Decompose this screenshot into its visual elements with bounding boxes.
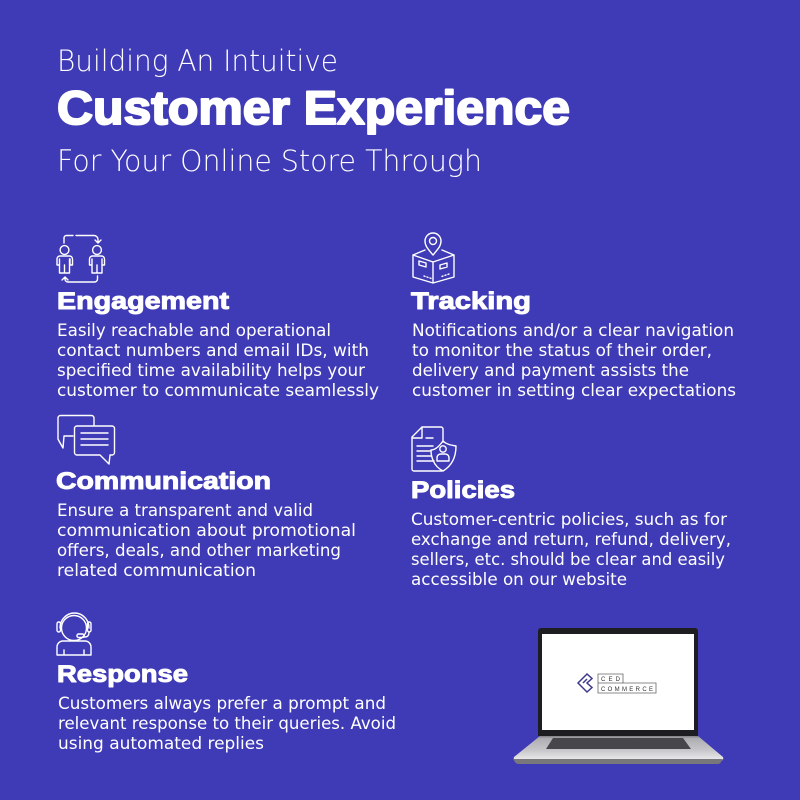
- icon: two people exchanging: [57, 236, 105, 282]
- logo mark: [578, 674, 592, 692]
- panel: response: [57, 613, 396, 753]
- title: Building An Intuitive: [57, 44, 338, 78]
- text block: delivery and payment assists the: [412, 361, 689, 380]
- text block: to monitor the status of their order,: [412, 341, 712, 360]
- panel: policies: [411, 427, 731, 589]
- text block: specified time availability helps your: [57, 361, 365, 380]
- text block: Notifications and/or a clear navigation: [412, 321, 734, 340]
- laptop lid: [538, 628, 698, 736]
- panel: tracking: [411, 233, 736, 400]
- panel: engagement: [57, 236, 379, 400]
- text block: using automated replies: [58, 734, 264, 753]
- text block: [58, 694, 396, 753]
- icon: box with location pin: [413, 233, 454, 283]
- text block: [57, 501, 356, 580]
- heading: Tracking: [411, 288, 531, 315]
- title: [57, 44, 570, 178]
- title: For Your Online Store Through: [57, 144, 482, 178]
- text block: Customer-centric policies, such as for: [411, 510, 727, 529]
- icon: document with shield: [412, 427, 456, 471]
- logo: [578, 674, 656, 693]
- text block: [412, 321, 736, 400]
- logo wordmark: COMMERCE: [601, 687, 653, 693]
- title: Customer Experience: [57, 81, 570, 134]
- text block: customer to communicate seamlessly: [57, 381, 379, 400]
- text block: communication about promotional: [57, 521, 356, 540]
- icon: headset agent: [57, 613, 91, 655]
- text block: sellers, etc. should be clear and easily: [411, 550, 725, 569]
- logo wordmark: CED: [601, 677, 621, 683]
- logo wordmark: [598, 674, 656, 693]
- heading: Response: [57, 661, 188, 688]
- text block: exchange and return, refund, delivery,: [411, 530, 731, 549]
- text block: [411, 510, 731, 589]
- text block: contact numbers and email IDs, with: [57, 341, 369, 360]
- text block: Ensure a transparent and valid: [57, 501, 313, 520]
- text block: related communication: [57, 561, 256, 580]
- laptop illustration: [513, 628, 723, 764]
- text block: offers, deals, and other marketing: [57, 541, 341, 560]
- laptop base: [514, 736, 723, 761]
- text block: Easily reachable and operational: [57, 321, 331, 340]
- text block: [57, 321, 379, 400]
- text block: relevant response to their queries. Avoid: [58, 714, 396, 733]
- heading: Communication: [56, 468, 271, 495]
- text block: customer in setting clear expectations: [412, 381, 736, 400]
- laptop screen: [542, 634, 694, 730]
- panel: communication: [56, 416, 356, 580]
- text block: accessible on our website: [411, 570, 627, 589]
- heading: Policies: [411, 477, 515, 504]
- heading: Engagement: [57, 288, 229, 315]
- text block: Customers always prefer a prompt and: [58, 694, 386, 713]
- icon: speech bubbles: [58, 416, 114, 464]
